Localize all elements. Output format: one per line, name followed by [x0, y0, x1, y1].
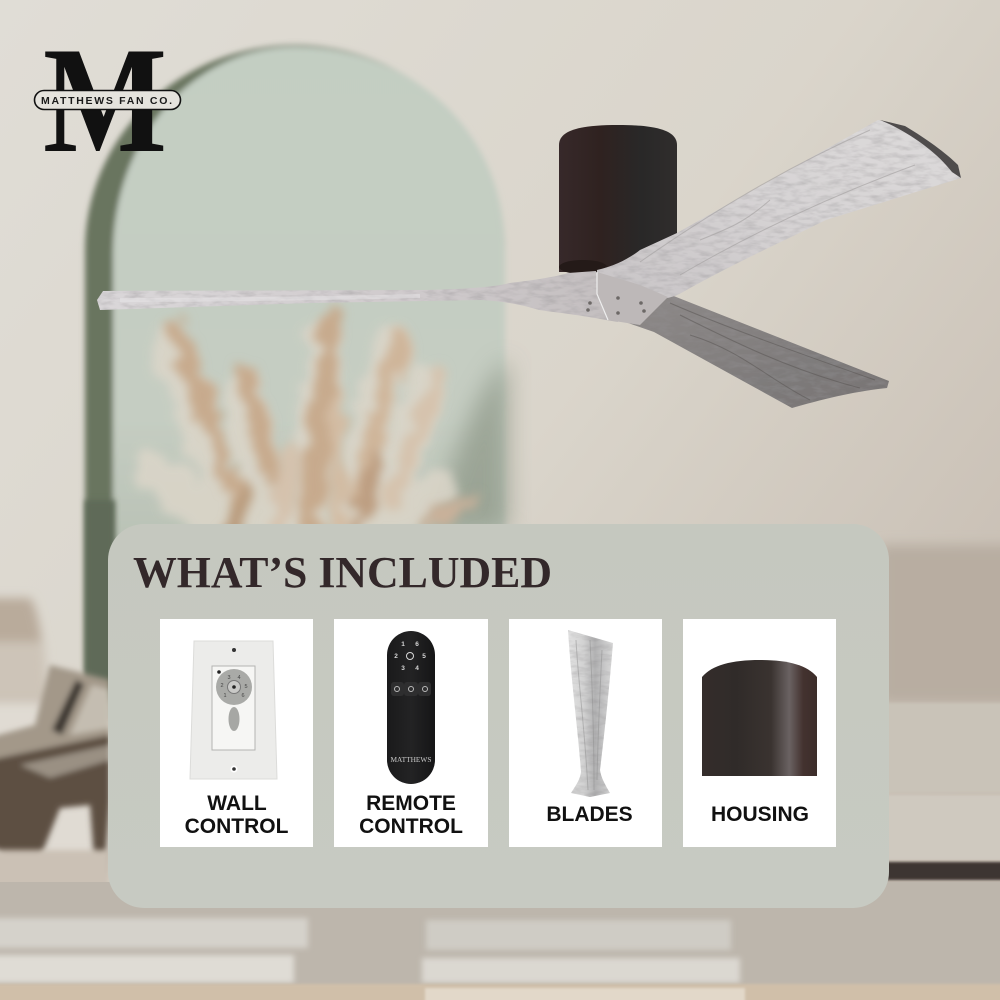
arched wall niche: [85, 45, 505, 720]
fan hub with bolts: [586, 272, 668, 325]
logo name pill: MATTHEWS FAN CO.: [41, 95, 172, 107]
ceiling fan: [97, 120, 961, 408]
icon: remote control: 1: [401, 641, 405, 648]
floor: [0, 850, 1000, 1000]
fan lower blade: [614, 295, 889, 408]
icon: wall control: 5: [244, 684, 248, 690]
icon: blade: [568, 630, 613, 797]
throw blanket: [0, 665, 110, 888]
card: wall control: [160, 619, 313, 847]
icon: remote control: 2: [394, 653, 398, 660]
heading: WHAT’S INCLUDED: [133, 548, 552, 597]
card: remote control: [334, 619, 488, 847]
icon: remote control: 4: [415, 665, 419, 672]
label: housing: HOUSING: [711, 803, 809, 826]
niche base edge: [85, 500, 115, 690]
label: remote control: CONTROL: [359, 815, 463, 838]
icon: wall control: [190, 641, 277, 779]
icon: remote control: 3: [401, 665, 405, 672]
fan left blade: [97, 271, 618, 322]
icon: wall control: 6: [241, 693, 245, 699]
left armchair: [0, 598, 110, 870]
icon: wall control: 1: [223, 693, 227, 699]
label: blades: BLADES: [546, 803, 633, 826]
card: housing: [683, 619, 836, 847]
panel: what's included: [108, 524, 889, 908]
icon: housing: [702, 660, 817, 776]
icon: remote control: 5: [422, 653, 426, 660]
label: remote control: REMOTE: [366, 792, 456, 815]
fan housing: [559, 125, 677, 274]
icon: wall control: 3: [227, 675, 231, 681]
icon: remote control: 6: [415, 641, 419, 648]
arch inner shadow lower right: [430, 360, 508, 530]
logo monogram M: M: [43, 16, 167, 184]
icon: remote control: MATTHEWS: [390, 756, 432, 764]
pampas grass decoration: [150, 318, 470, 530]
label: wall control: CONTROL: [185, 815, 289, 838]
fan upper right blade: [597, 120, 961, 299]
logo: [34, 16, 180, 184]
icon: wall control: 4: [237, 675, 241, 681]
right sofa: [880, 545, 1000, 880]
icon: wall control: 2: [220, 683, 224, 689]
logo name pill: [34, 90, 180, 110]
card: blades: [509, 619, 662, 847]
icon: remote control: [387, 631, 435, 784]
label: wall control: WALL: [207, 792, 267, 815]
